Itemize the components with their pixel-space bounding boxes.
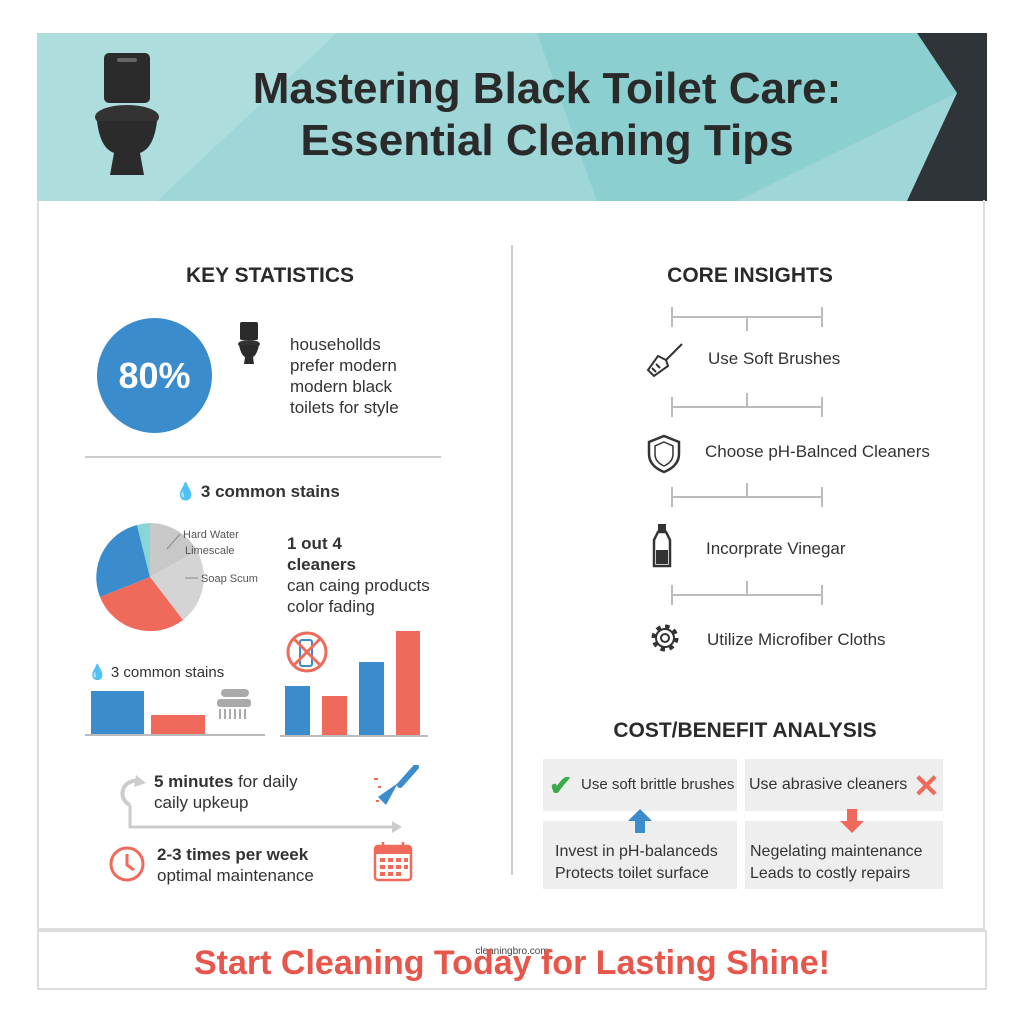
box: invest: Invest in pH-balanceds	[555, 843, 718, 860]
footer text: Start Cleaning Today for Lasting Shine!	[194, 944, 830, 982]
title: Mastering Black Toilet Care:	[253, 64, 841, 113]
timeline: 5 minutes: 5 minutes for daily	[154, 772, 298, 791]
pie chart: Limescale	[185, 545, 235, 557]
pie chart: Hard Water	[183, 529, 239, 541]
icon: clock	[110, 846, 144, 882]
text: households: modern black	[290, 377, 392, 396]
insight: soft brushes: Use Soft Brushes	[708, 349, 840, 368]
box: abrasive: Use abrasive cleaners	[749, 776, 907, 793]
heading: core insights: CORE INSIGHTS	[667, 264, 833, 287]
box: neglect: Negelating maintenance	[750, 843, 923, 860]
box: abrasive: ✕	[913, 768, 940, 804]
main panel frame	[37, 200, 985, 930]
insight: pH cleaners: Choose pH-Balnced Cleaners	[705, 442, 930, 461]
icon: black toilet	[95, 53, 159, 175]
3 common stains heading: 💧 3 common stains	[175, 482, 340, 501]
pie chart	[96, 523, 258, 632]
heading: COST/BENEFIT ANALYSIS	[613, 719, 877, 742]
stat circle 80%: 80%	[118, 355, 191, 396]
text: 1 out of 4 cleaners	[287, 534, 430, 616]
box: abrasive	[745, 759, 943, 811]
panel: cost/benefit analysis	[543, 719, 943, 889]
small bar chart left: 💧 3 common stains	[88, 664, 224, 681]
icon: blue brush	[374, 765, 419, 805]
arrow down red	[840, 809, 864, 833]
box: neglect	[745, 821, 943, 889]
text: 1 out of 4 cleaners: color fading	[287, 597, 375, 616]
text: households: toilets for style	[290, 398, 399, 417]
footer banner	[37, 930, 987, 990]
panel: core insights	[646, 264, 930, 652]
timeline: 5 minutes: caily upkeup	[154, 793, 249, 812]
icon: calendar	[374, 842, 412, 882]
stat circle 80%	[97, 318, 212, 433]
box: invest	[543, 821, 737, 889]
heading: key statistics: KEY STATISTICS	[186, 264, 354, 287]
icon: bottle	[652, 524, 672, 568]
icon: brush outline	[646, 343, 683, 378]
text: 1 out of 4 cleaners: cleaners	[287, 555, 356, 574]
small bar chart right	[280, 631, 428, 737]
text: 2-3 times per week	[157, 845, 314, 885]
box: soft brushes	[543, 759, 737, 811]
icon: gear	[652, 624, 678, 652]
text: households	[290, 335, 399, 417]
panel: key statistics	[85, 264, 441, 885]
icon: shield	[648, 434, 680, 474]
text: households: prefer modern	[290, 356, 397, 375]
pie chart: Soap Scum	[201, 573, 258, 585]
arrow up blue	[628, 809, 652, 833]
header banner	[37, 33, 987, 201]
small bar chart left	[85, 664, 265, 736]
timeline: 5 minutes	[120, 772, 402, 833]
text: 1 out of 4 cleaners: can caing products	[287, 576, 430, 595]
watermark: cleaningbro.com	[475, 946, 549, 957]
insight: microfiber: Utilize Microfiber Cloths	[707, 630, 886, 649]
text: 1 out of 4 cleaners: 1 out 4	[287, 534, 342, 553]
icon: small toilet	[238, 322, 260, 364]
text: households: househollds	[290, 335, 381, 354]
insight: vinegar: Incorprate Vinegar	[706, 539, 846, 558]
box: soft brushes: ✔	[549, 770, 572, 801]
box: soft brushes: Use soft brittle brushes	[581, 776, 734, 793]
box: invest: Protects toilet surface	[555, 865, 709, 882]
text: 2-3 times per week: 2-3 times per week	[157, 845, 308, 864]
title: Essential Cleaning Tips	[300, 116, 794, 165]
box: neglect: Leads to costly repairs	[750, 865, 910, 882]
text: 2-3 times per week: optimal maintenance	[157, 866, 314, 885]
title	[253, 64, 841, 165]
